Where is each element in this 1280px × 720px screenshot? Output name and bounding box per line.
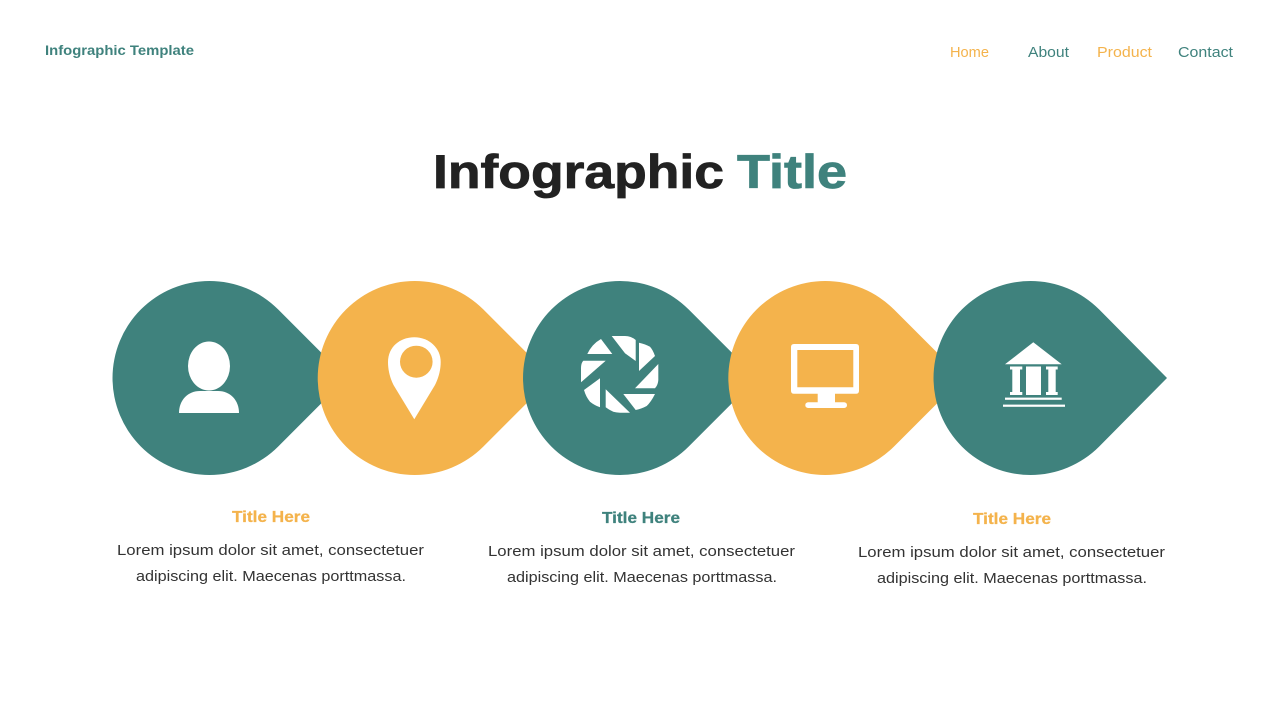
text block 2 body: Lorem ipsum dolor sit amet, consectetuer	[488, 543, 795, 560]
text block 3 body: Lorem ipsum dolor sit amet, consectetuer	[858, 544, 1165, 561]
text block 3 body	[858, 544, 1165, 587]
main title: Infographic	[433, 145, 724, 198]
main title	[433, 145, 847, 198]
step 1: person teardrop	[113, 281, 347, 475]
navigation menu: Product	[1097, 45, 1152, 61]
text block 3 body: adipiscing elit. Maecenas porttmassa.	[877, 570, 1147, 587]
text block 3	[858, 511, 1165, 587]
main title: Title	[737, 145, 847, 198]
icon: person	[179, 342, 239, 413]
text block 2 heading: Title Here	[602, 510, 680, 527]
icon: map pin	[388, 337, 441, 419]
text block 1 body	[117, 542, 424, 585]
navigation menu: Home	[950, 45, 989, 61]
step 2: location teardrop	[318, 281, 552, 475]
text block 1	[117, 509, 424, 585]
text block 2	[488, 510, 795, 586]
step 3: aperture teardrop	[523, 281, 757, 475]
step 5: bank teardrop	[934, 281, 1167, 475]
text block 1 body: Lorem ipsum dolor sit amet, consectetuer	[117, 542, 424, 559]
icon: monitor	[791, 344, 859, 408]
text block 3 heading: Title Here	[973, 511, 1051, 528]
icon: bank building	[1003, 342, 1065, 407]
navigation menu	[950, 45, 1233, 61]
icon: camera aperture	[581, 336, 658, 413]
navigation menu: About	[1028, 45, 1069, 61]
text block 1 body: adipiscing elit. Maecenas porttmassa.	[136, 568, 406, 585]
text block 2 body	[488, 543, 795, 586]
text block 2 body: adipiscing elit. Maecenas porttmassa.	[507, 569, 777, 586]
text block 1 heading: Title Here	[232, 509, 310, 526]
step 4: monitor teardrop	[728, 281, 962, 475]
brand heading: Infographic Template	[45, 43, 195, 58]
navigation menu: Contact	[1178, 45, 1233, 61]
